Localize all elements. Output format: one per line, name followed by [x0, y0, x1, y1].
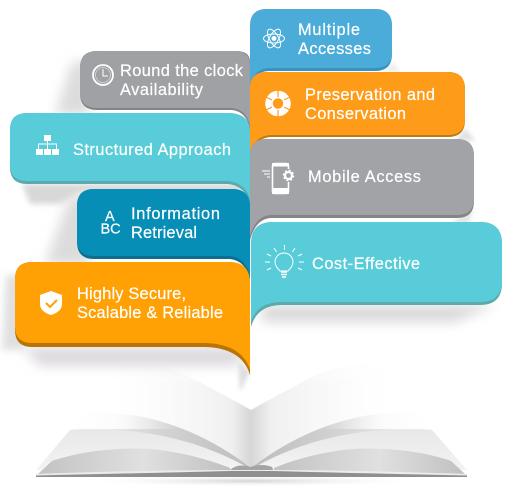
label: information retrieval: Retrieval	[131, 224, 197, 242]
icon: abc: A	[105, 209, 115, 225]
icon: clock	[93, 65, 113, 85]
label: highly secure: Scalable & Reliable	[77, 304, 223, 322]
icon: shield	[40, 291, 62, 315]
soft shadows behind bubbles	[2, 62, 496, 392]
right top page	[251, 363, 415, 468]
label: highly secure	[77, 285, 223, 322]
left top page	[87, 363, 251, 468]
right lower pages	[255, 429, 467, 470]
bubble: information retrieval	[77, 189, 250, 280]
spine	[229, 465, 274, 472]
label: cost-effective: Cost-Effective	[312, 255, 420, 273]
top fade	[90, 355, 412, 385]
bubble: structured approach	[10, 113, 250, 205]
icon: phone and gear	[262, 163, 295, 194]
icon: atom	[264, 27, 284, 50]
cover	[36, 470, 467, 477]
icon: abc: BC	[100, 222, 121, 238]
icon: hierarchy	[36, 135, 59, 155]
left page edges	[70, 412, 251, 468]
label: structured approach: Structured Approach	[73, 141, 231, 159]
right bottom band	[274, 448, 465, 474]
label: multiple accesses	[298, 21, 371, 58]
label: information retrieval: Information	[131, 205, 220, 223]
label: preservation and conservation: Preservation and	[305, 86, 435, 104]
label: round the clock: Availability	[120, 81, 204, 99]
bubble: highly secure	[15, 262, 250, 375]
label: mobile access: Mobile Access	[308, 168, 421, 186]
left lower pages	[36, 429, 247, 470]
label: round the clock	[120, 62, 244, 99]
fade over upper pages	[60, 355, 180, 429]
right page edges	[251, 412, 432, 468]
bubble: multiple accesses	[250, 9, 392, 85]
label: preservation and conservation: Conservation	[305, 105, 406, 123]
label: highly secure: Highly Secure,	[77, 285, 186, 303]
bubble: preservation	[250, 72, 465, 155]
label: information retrieval	[131, 205, 220, 242]
label: multiple accesses: Multiple	[298, 21, 360, 39]
bubble: cost-effective	[251, 222, 502, 327]
label: multiple accesses: Accesses	[298, 40, 371, 58]
bubble: round the clock	[80, 51, 250, 132]
illustration: open book	[36, 355, 467, 487]
ground shadow	[76, 475, 426, 487]
icon: abc	[100, 209, 121, 238]
icon: light bulb	[265, 245, 304, 277]
icon: lifebuoy	[266, 90, 290, 117]
label: preservation and conservation	[305, 86, 435, 123]
left bottom band	[38, 448, 230, 474]
label: round the clock: Round the clock	[120, 62, 244, 80]
fade over upper right pages	[322, 355, 442, 429]
bubble: mobile access	[250, 139, 474, 240]
